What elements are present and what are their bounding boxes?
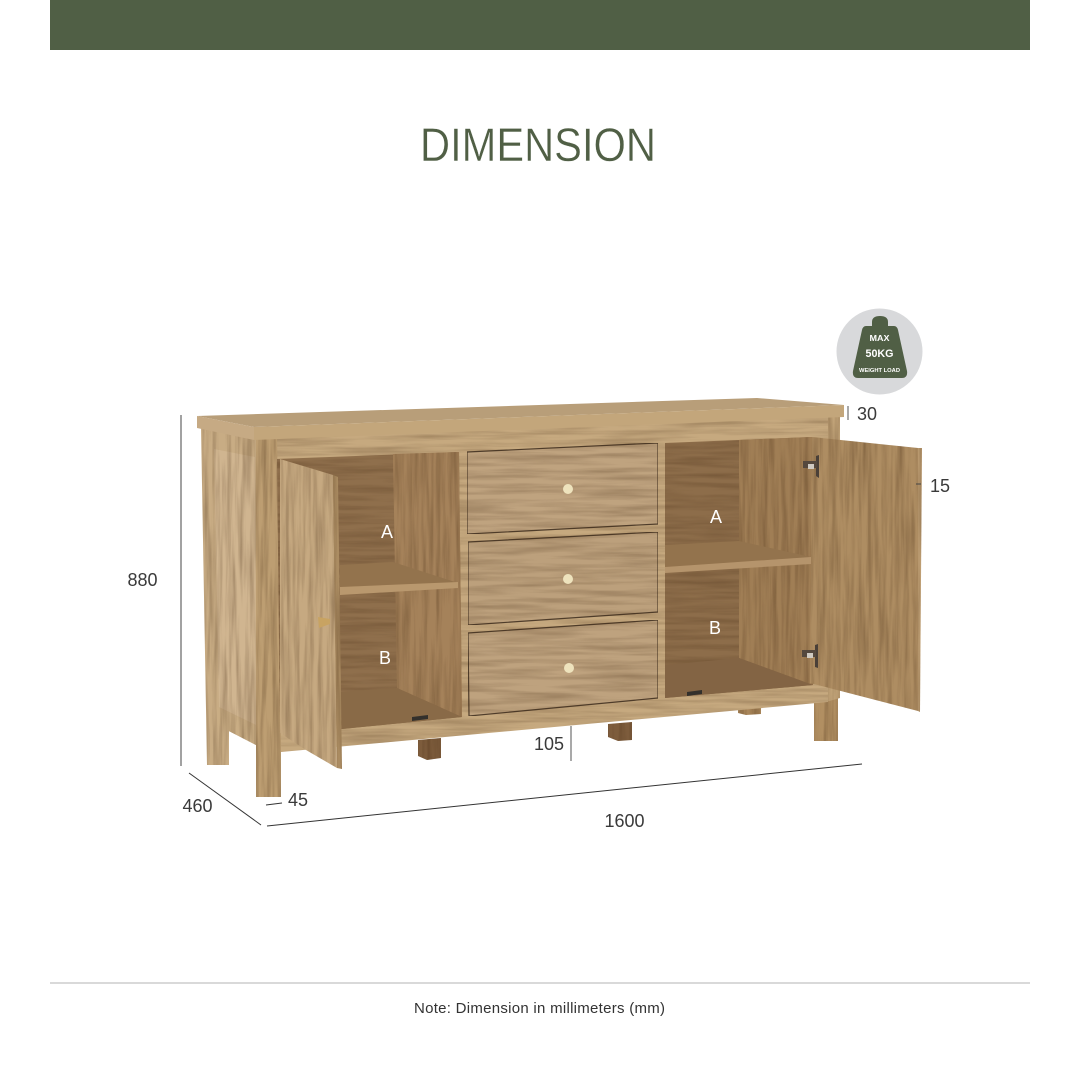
left cabinet floor bbox=[340, 688, 462, 729]
shelf labels: B bbox=[379, 648, 391, 668]
dimension: height: 880 bbox=[127, 570, 158, 590]
drawer 3 bbox=[468, 620, 658, 716]
side panel and legs bbox=[201, 415, 840, 797]
footer divider bbox=[50, 982, 1030, 984]
table top bbox=[197, 398, 844, 440]
hinges bbox=[802, 455, 819, 668]
shelf labels bbox=[379, 507, 722, 668]
left door knob bbox=[318, 617, 330, 628]
sideboard illustration bbox=[197, 398, 922, 797]
shelf labels: A bbox=[710, 507, 722, 527]
icon: weight bbox=[853, 316, 907, 378]
dimension: door thickness bbox=[916, 476, 950, 496]
cable clip left bbox=[412, 715, 428, 721]
drawer knobs bbox=[563, 484, 574, 673]
top banner bbox=[50, 0, 1030, 50]
dimension: leg width: 45 bbox=[288, 790, 308, 810]
footnote: Note: Dimension in millimeters (mm) bbox=[414, 1000, 665, 1017]
right cabinet interior bbox=[665, 437, 813, 698]
right cabinet floor bbox=[665, 658, 813, 698]
dimension: leg width bbox=[266, 790, 308, 810]
dimension: top thickness bbox=[848, 404, 877, 424]
left cabinet inner side bbox=[393, 452, 462, 717]
dimension: depth bbox=[182, 773, 261, 825]
drawer 2 bbox=[468, 532, 658, 625]
dimension: door thickness: 15 bbox=[930, 476, 950, 496]
dimension: width bbox=[267, 764, 862, 831]
shelf labels: A bbox=[381, 522, 393, 542]
weight load badge bbox=[836, 308, 922, 394]
weight load badge: MAX bbox=[870, 334, 890, 343]
drawer 1 bbox=[467, 443, 658, 534]
cable clip right bbox=[687, 690, 702, 696]
left cabinet shelf bbox=[340, 562, 458, 595]
title: DIMENSION bbox=[420, 118, 656, 171]
weight load badge: WEIGHT LOAD bbox=[859, 368, 900, 374]
dimension: width: 1600 bbox=[604, 811, 645, 831]
right cabinet shelf bbox=[665, 541, 811, 573]
dimension: leg height: 105 bbox=[534, 734, 564, 754]
right door bbox=[810, 437, 922, 712]
dimension: depth: 460 bbox=[182, 796, 213, 816]
left cabinet interior bbox=[277, 452, 462, 733]
shelf labels: B bbox=[709, 618, 721, 638]
left door bbox=[280, 459, 342, 769]
front frame bbox=[277, 414, 828, 752]
back feet bbox=[418, 704, 761, 760]
dimension: top thickness: 30 bbox=[857, 404, 877, 424]
dimension: leg height bbox=[534, 726, 571, 761]
weight load badge: 50KG bbox=[866, 348, 894, 360]
right cabinet inner side bbox=[739, 437, 813, 685]
